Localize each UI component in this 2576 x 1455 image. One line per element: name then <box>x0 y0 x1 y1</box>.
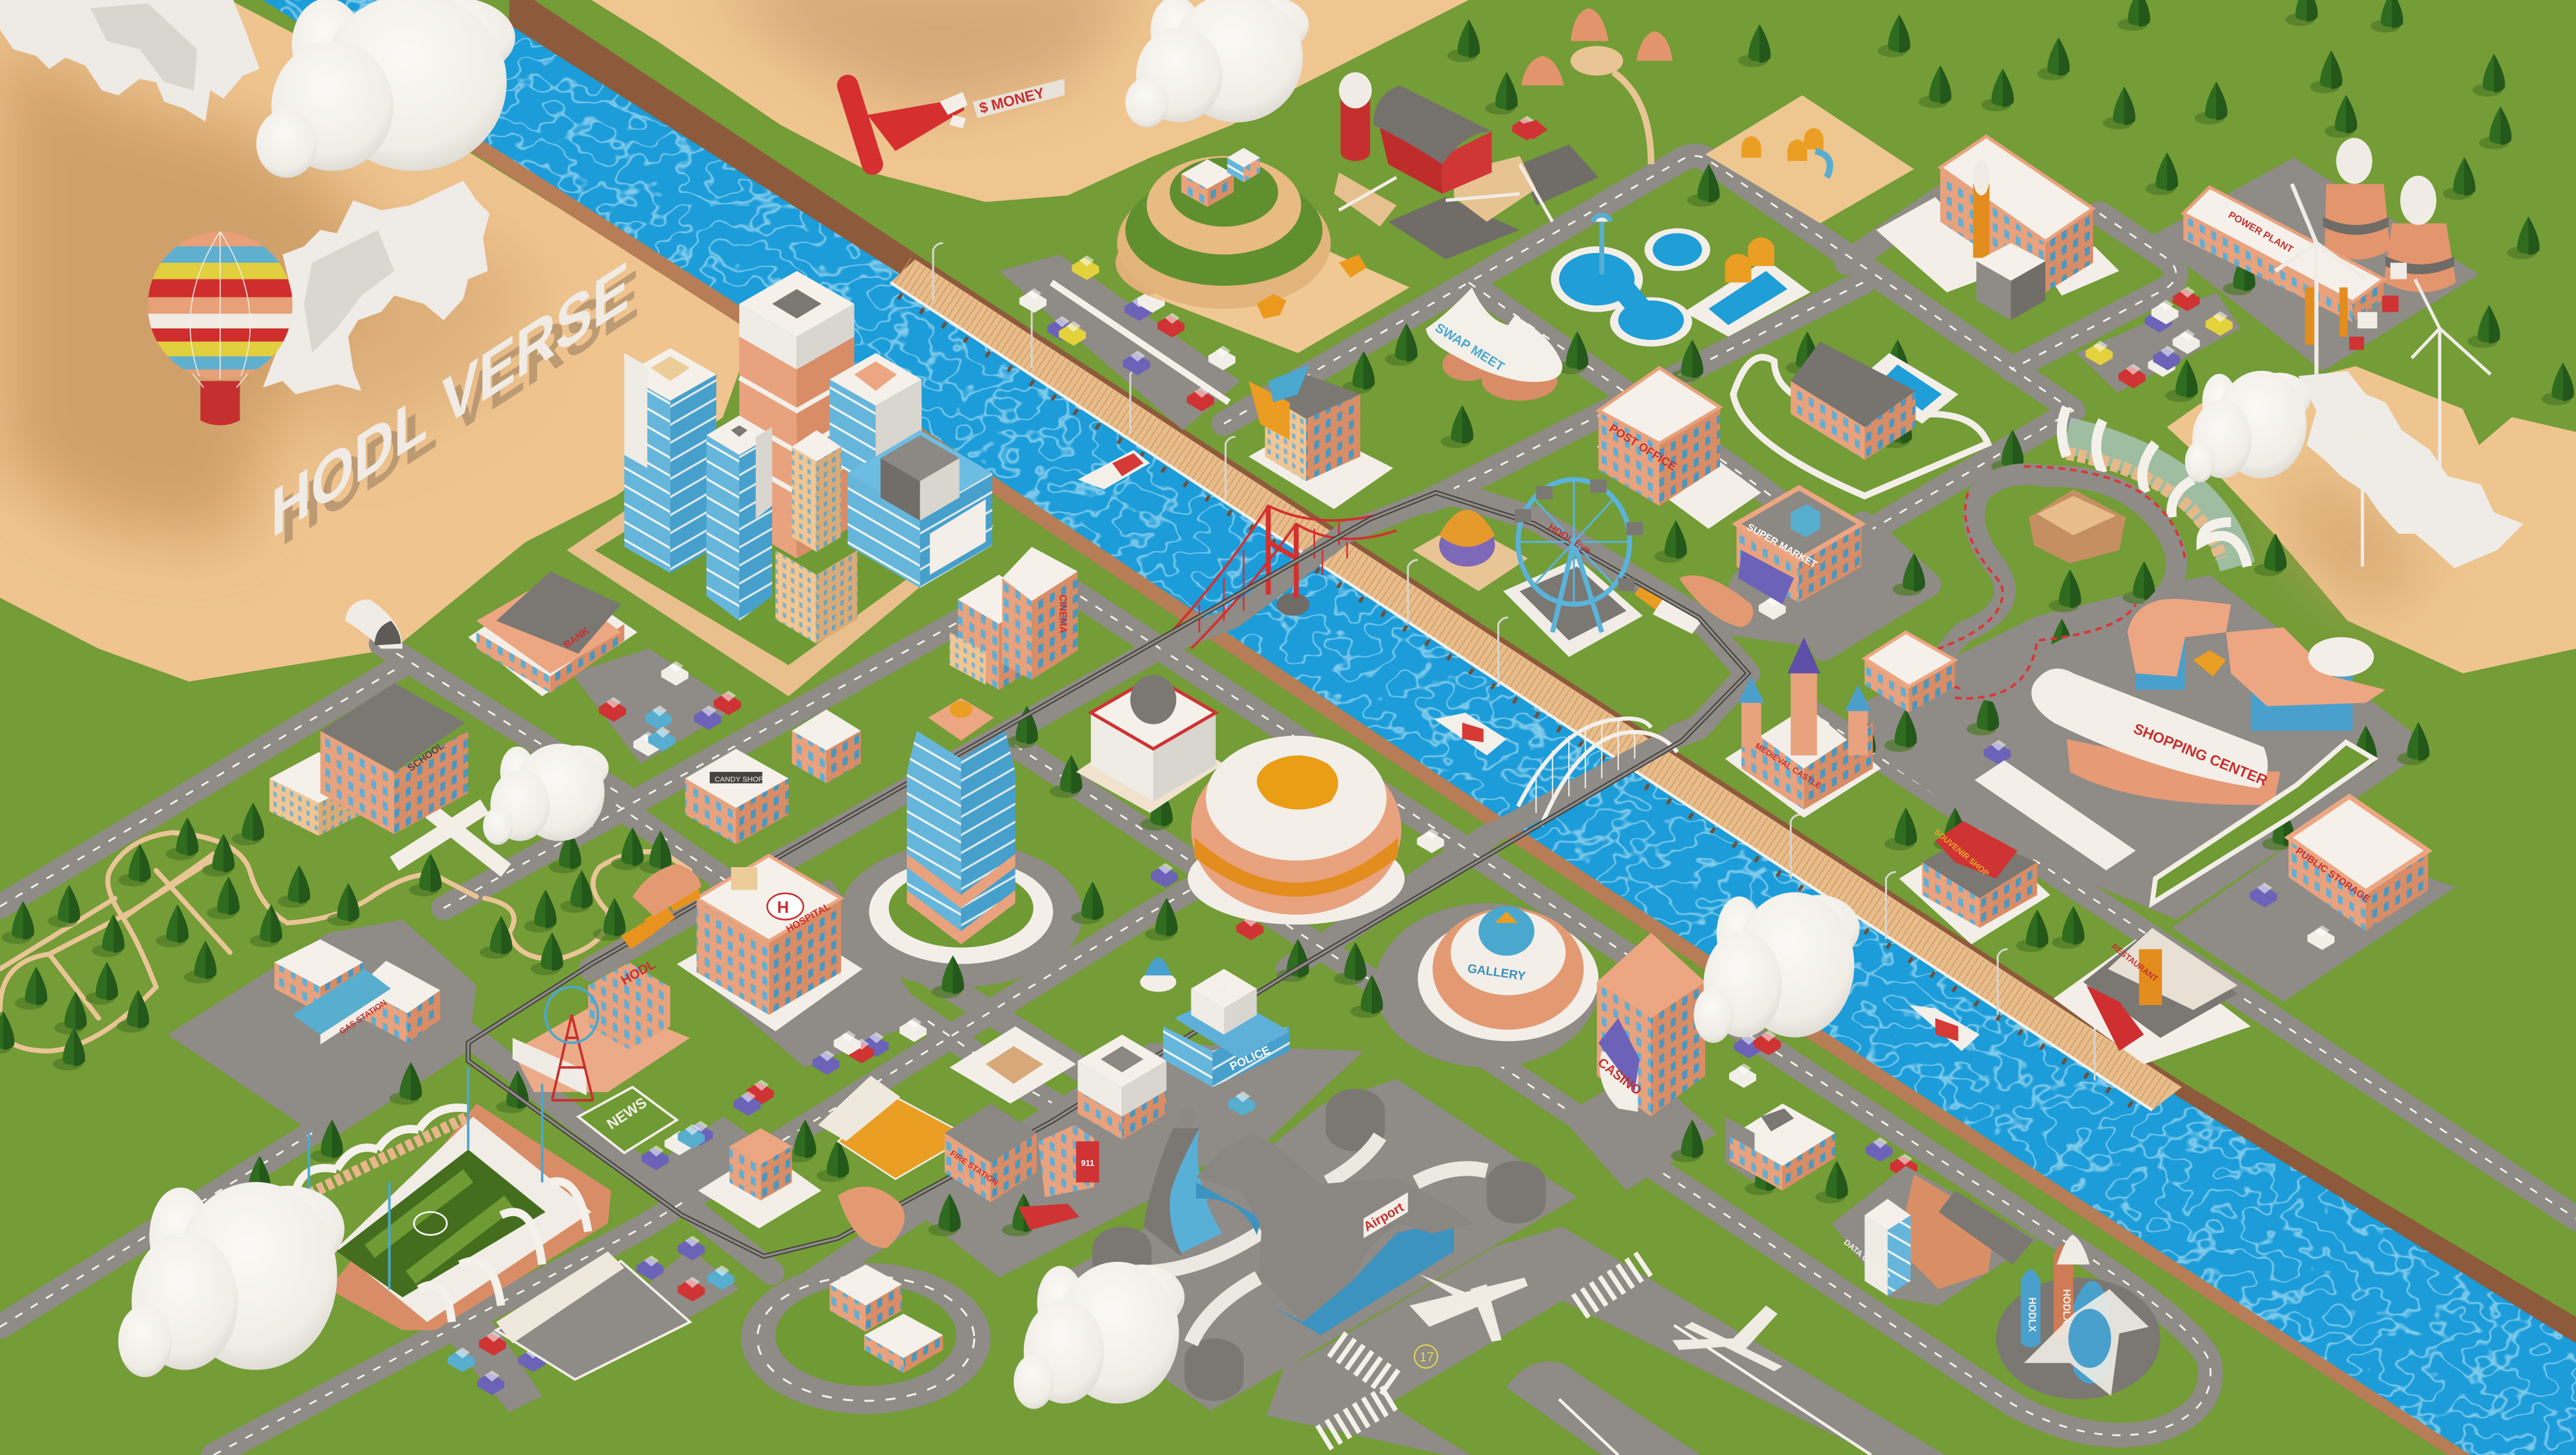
rocket: HODLX <box>2061 1289 2072 1324</box>
candy shop <box>685 749 788 844</box>
mountain: top <box>591 0 1469 202</box>
barn <box>1374 86 1492 194</box>
mansion <box>1733 342 1988 496</box>
basketball court <box>496 1252 690 1380</box>
plaza: skyscrapers <box>567 411 994 697</box>
hospital: H <box>777 899 789 917</box>
bank: BANK <box>562 625 591 651</box>
news station: HODL <box>619 957 658 988</box>
parking strip top <box>1052 283 1229 402</box>
orange tower <box>739 271 855 558</box>
shopping center <box>2031 599 2385 805</box>
roundabouts <box>741 843 1598 1414</box>
terminal roof <box>1196 1133 1473 1322</box>
runway: 17 <box>1419 1351 1434 1365</box>
glass tower <box>706 415 772 621</box>
wind turbines <box>2275 184 2490 567</box>
casino tower <box>1595 933 1705 1117</box>
farm <box>1334 72 1598 259</box>
roundabout: gallery <box>1375 903 1598 1067</box>
data center <box>1832 1166 2037 1306</box>
dome building <box>1076 675 1224 813</box>
small factory on hill <box>1181 148 1260 207</box>
hospital: HOSPITAL <box>784 901 832 935</box>
tunnel: rail <box>838 1187 905 1248</box>
railway <box>468 493 1748 1256</box>
tractor <box>1520 120 1548 140</box>
police: H <box>1216 982 1226 999</box>
boats <box>1077 450 1980 1051</box>
plaza: school <box>394 806 506 870</box>
pharmacy on roundabout <box>829 1264 943 1373</box>
roundabout: bottom <box>741 1263 990 1414</box>
terrace hill <box>1115 148 1410 353</box>
radio tower <box>545 987 598 1100</box>
mountain: left with HODL sign <box>0 0 739 682</box>
arch bridge <box>1488 718 1678 836</box>
power plant <box>2183 138 2456 350</box>
data center: DATA CENTER <box>1842 1237 1892 1281</box>
tunnel <box>345 599 402 649</box>
rocket: HODLX <box>2027 1297 2038 1332</box>
balloon <box>148 232 292 426</box>
glass terminal <box>1270 1219 1454 1335</box>
red airplane with banner <box>848 79 1065 164</box>
souvenir shop <box>1899 821 2050 944</box>
fun land building <box>1249 364 1393 509</box>
runway <box>1267 1226 1945 1455</box>
sign: HODL VERSE: HODL VERSE <box>281 254 639 561</box>
gardens <box>1520 144 1598 205</box>
gallery <box>1432 906 1584 1029</box>
cloud: bottom center <box>1014 1262 1184 1409</box>
snow: right peak <box>2298 371 2523 568</box>
police <box>1163 969 1290 1087</box>
toy store <box>1864 632 1955 713</box>
train 2 <box>621 864 701 949</box>
low blue block <box>848 430 992 588</box>
glass arena <box>2062 408 2248 567</box>
castle: MEDIEVAL CASTLE <box>1754 741 1823 791</box>
news plaza: NEWS <box>603 1094 650 1132</box>
fire station: 911 <box>1081 1158 1094 1168</box>
chimney <box>1973 159 1989 258</box>
orange canopy <box>2067 739 2280 805</box>
casino tower: CASINO <box>1595 1056 1644 1098</box>
pier <box>891 259 2182 1113</box>
banner: $ MONEY <box>978 84 1046 117</box>
cloud: bottom left <box>118 1182 345 1377</box>
swap meet tent: SWAP MEET <box>1432 321 1507 375</box>
right blue tower <box>829 353 922 488</box>
factory <box>1876 136 2119 320</box>
post office: POST OFFICE <box>1607 422 1679 473</box>
boat 1 <box>1077 450 1150 489</box>
floodlights <box>309 1067 542 1289</box>
cloud: right mountain <box>2185 371 2311 482</box>
blue tall tower <box>624 348 716 573</box>
gray lots <box>167 158 2479 1413</box>
roundabout: tower <box>840 843 1083 987</box>
cinema <box>949 547 1077 690</box>
red suspension bridge <box>1160 494 1455 649</box>
supermarket <box>1736 488 1861 605</box>
post office <box>1597 368 1761 529</box>
sand tower <box>775 430 858 644</box>
snow peak: middle <box>263 181 489 394</box>
rock hill <box>2029 489 2126 563</box>
candy shop: CANDY SHOP <box>715 776 764 784</box>
rocket <box>1996 1235 2161 1399</box>
amusement domes <box>1521 8 1672 164</box>
bank <box>468 572 638 697</box>
race track <box>1930 466 2185 699</box>
shopping center: SHOPPING CENTER <box>2131 720 2270 789</box>
gallery: GALLERY <box>1466 962 1526 984</box>
cloud: school <box>483 744 609 845</box>
tennis court <box>818 1076 969 1179</box>
monument plaza <box>949 1026 1076 1103</box>
restaurant: RESTAURANT <box>2110 941 2160 984</box>
cooling towers <box>2323 138 2456 292</box>
airplane 1 <box>1410 1274 1528 1342</box>
snow peak: upper left <box>0 0 260 122</box>
fire station <box>945 1103 1099 1230</box>
news plaza <box>578 1087 677 1153</box>
park paths <box>0 832 690 1051</box>
lamp posts <box>933 243 2105 1080</box>
train <box>1634 576 1753 634</box>
fire station: FIRE STATION <box>949 1148 1000 1187</box>
plant building: POWER PLANT <box>2226 209 2295 256</box>
trees: west park <box>0 803 672 1071</box>
fountain <box>1140 957 1177 992</box>
trees: north field <box>1447 0 2574 576</box>
playground <box>1705 95 1914 223</box>
banner <box>972 79 1065 118</box>
apartment <box>1077 1035 1166 1140</box>
white jet bridges <box>1137 1136 1487 1344</box>
hospital <box>677 856 862 1031</box>
public storage <box>2289 796 2428 931</box>
cafe <box>698 1128 822 1228</box>
airport sign: Airport <box>1361 1200 1406 1234</box>
hotel block <box>1725 1103 1835 1190</box>
castle <box>1725 637 1881 818</box>
souvenir shop: SOUVENIR SHOP <box>1933 827 1991 878</box>
train tunnel <box>1679 576 1753 627</box>
boat 3 <box>1909 1005 1980 1051</box>
cloud: casino <box>1694 892 1860 1043</box>
school: SCHOOL <box>406 740 446 774</box>
ferris wheel <box>1503 480 1643 657</box>
tower: blue skyscraper <box>907 698 1016 944</box>
white roof <box>2031 668 2268 788</box>
plant building <box>2183 187 2384 322</box>
boat 2 <box>1434 713 1506 755</box>
airplane 2 <box>1672 1306 1783 1371</box>
silo <box>1339 72 1372 161</box>
ferris wheel: HODL Eye <box>1546 521 1593 556</box>
fuel tanks <box>1092 1089 1546 1401</box>
cloud: top left <box>256 0 515 178</box>
sign: HODL VERSE: HODL VERSE <box>271 246 629 553</box>
gray annex <box>1976 243 2045 320</box>
supermarket: SUPER MARKET <box>1745 521 1819 570</box>
news station <box>513 957 690 1153</box>
restaurant <box>2054 928 2251 1064</box>
public storage: PUBLIC STORAGE <box>2293 845 2372 905</box>
bakery <box>792 709 861 784</box>
parking strip <box>1975 760 2136 870</box>
skyscrapers <box>624 271 992 644</box>
pools <box>1551 215 1810 346</box>
cars <box>448 116 2334 1395</box>
gas station <box>274 939 440 1044</box>
police: POLICE <box>1228 1044 1272 1073</box>
soccer stadium <box>283 1103 611 1330</box>
carousel <box>1413 510 1528 591</box>
cloud: top center <box>1125 0 1309 127</box>
trees: city <box>238 164 2429 1236</box>
swap meet tent <box>1426 287 1562 400</box>
stadium arena <box>1188 736 1405 925</box>
mountain: right <box>2167 366 2576 673</box>
airport <box>1092 1089 1546 1401</box>
control tower <box>1144 1105 1222 1256</box>
gas station: GAS STATION <box>337 997 388 1036</box>
school <box>269 683 468 836</box>
blue halls <box>2128 599 2385 731</box>
cinema: CINEMA <box>1057 594 1068 634</box>
